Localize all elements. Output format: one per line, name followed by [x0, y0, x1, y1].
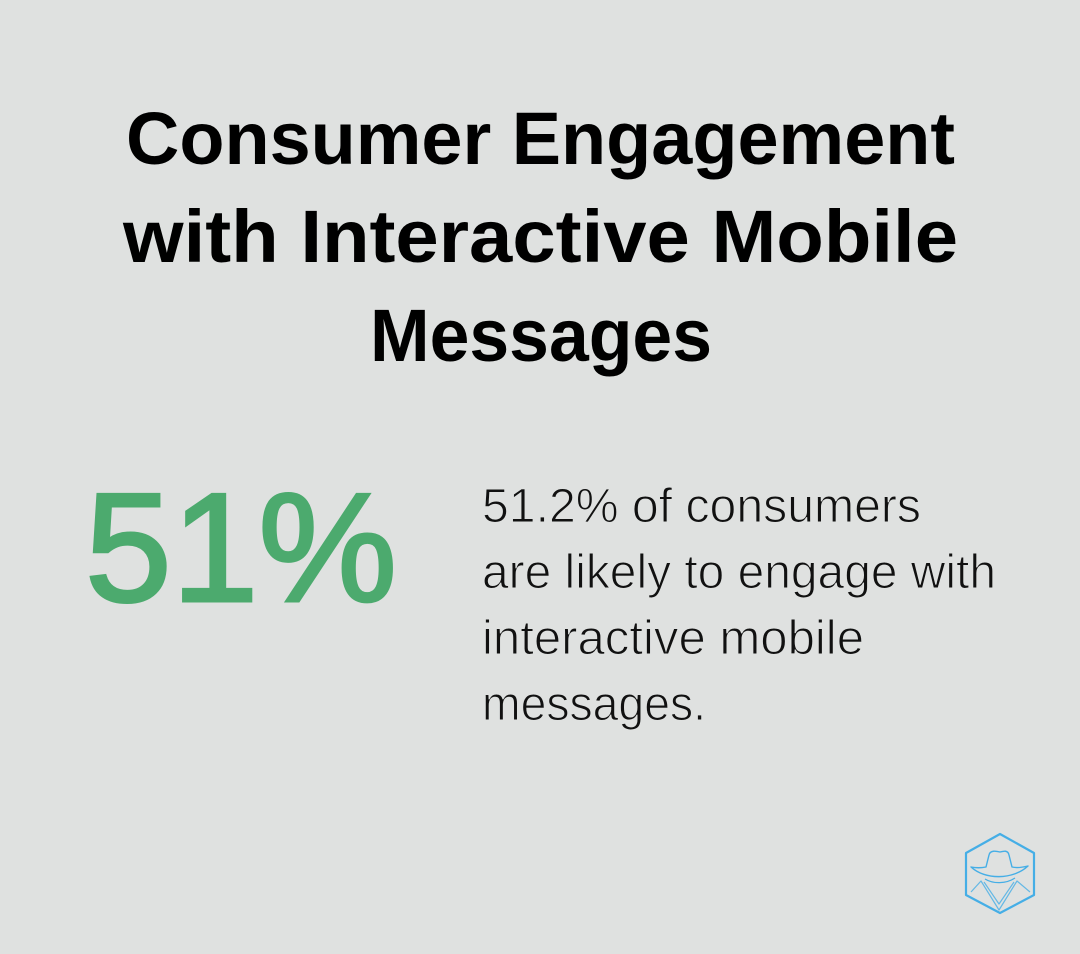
title: Messages [370, 294, 712, 377]
icon: spy logo in hexagon [966, 834, 1034, 913]
description text: are likely to engage with [482, 546, 996, 599]
description text: messages. [482, 678, 706, 731]
big statistic: 51%: 51% [85, 461, 397, 634]
title: with Interactive Mobile [122, 195, 958, 278]
title: Consumer Engagement [126, 97, 955, 180]
description text: 51.2% of consumers [482, 480, 921, 533]
description text: interactive mobile [482, 612, 864, 665]
title [122, 97, 958, 377]
description text [482, 480, 996, 731]
